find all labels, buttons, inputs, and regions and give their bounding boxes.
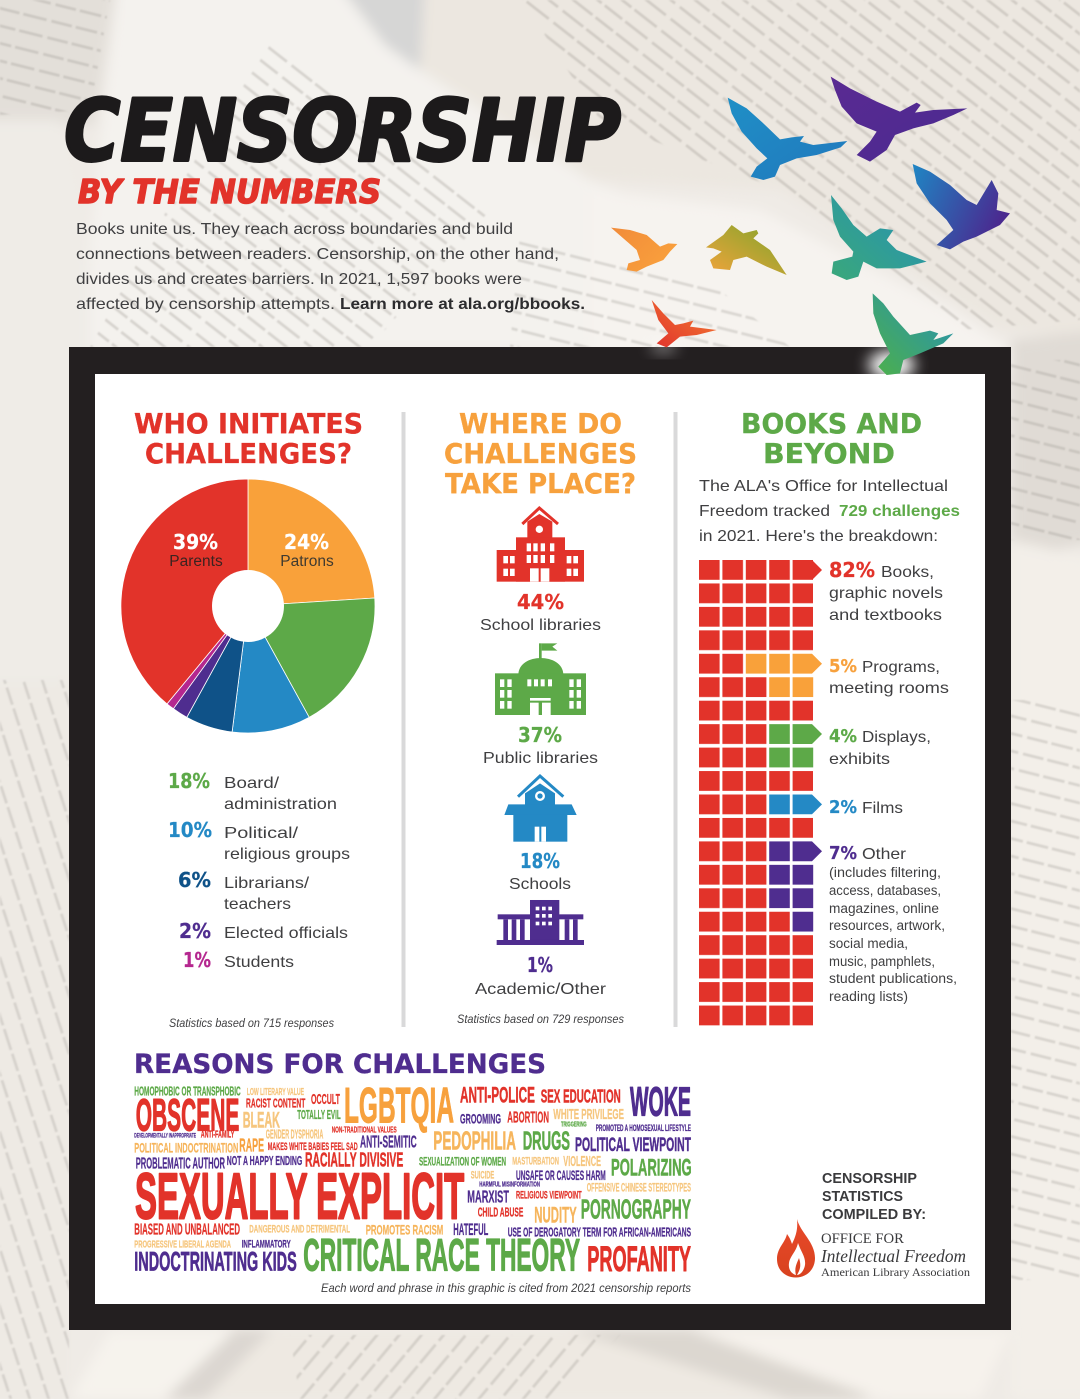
icon: public library [495,643,586,715]
word cloud: reasons for challenges: LOW LITERARY VALUE [247,1087,304,1098]
breakdown legend: exhibits [829,751,890,768]
breakdown legend: Films [862,800,903,817]
word cloud: reasons for challenges: MAKES WHITE BABIES FEEL SAD [268,1141,358,1153]
pie chart: Patrons [280,553,334,570]
word cloud: reasons for challenges: NUDITY [534,1203,577,1228]
bird: green [873,293,953,375]
black frame [69,347,1011,1330]
breakdown legend: Other [862,846,907,863]
credit heading: CENSORSHIP [822,1171,917,1187]
credit heading [822,1171,926,1223]
pie legend: Students [224,954,294,971]
bird: red-orange [652,300,717,347]
waffle chart [699,560,822,1029]
word cloud: reasons for challenges: USE OF DEROGATORY TERM FOR AFRICAN-AMERICANS [508,1225,691,1240]
word cloud: reasons for challenges: HARMFUL MISINFORMATION [479,1182,540,1189]
pie chart [121,479,375,733]
icons: library buildings [495,508,586,945]
word cloud: reasons for challenges: VIOLENCE [563,1154,601,1170]
heading: where do: CHALLENGES [444,437,637,470]
word cloud: reasons for challenges: UNSAFE OR CAUSES HARM [516,1167,606,1183]
breakdown legend: 82% [829,558,875,582]
word cloud: reasons for challenges: ANTI-FAMILY [201,1130,235,1141]
intro paragraph: affected by censorship attempts. [76,296,335,313]
credit heading: STATISTICS [822,1189,903,1205]
word cloud: reasons for challenges: PROMOTES RACISM [366,1221,443,1237]
word cloud: reasons for challenges: NON-TRADITIONAL VALUES [332,1125,397,1135]
breakdown legend: graphic novels [829,585,943,602]
credit heading: COMPILED BY: [822,1207,926,1223]
note: 715 responses: Statistics based on 715 responses [169,1016,334,1030]
heading: who initiates: WHO INITIATES [134,407,363,440]
location labels: Schools [509,876,571,893]
word cloud: reasons for challenges: PROBLEMATIC AUTHOR [136,1155,225,1172]
heading: who initiates [134,407,363,470]
breakdown legend: Books, [881,564,934,581]
breakdown legend: meeting rooms [829,680,949,697]
pie chart: 39% [173,530,218,554]
pie chart: Parents [169,553,223,570]
word cloud: reasons for challenges: CRITICAL RACE THEORY [303,1230,580,1281]
breakdown legend: access, databases, [829,883,941,898]
panel: where do challenges take place [444,407,637,1026]
pie legend: 10% [168,818,212,842]
word cloud: reasons for challenges: PROGRESSIVE LIBERAL AGENDA [134,1239,231,1250]
heading: where do: WHERE DO [459,407,622,440]
pie legend: 1% [183,948,211,972]
breakdown intro: The ALA's Office for Intellectual [699,478,948,495]
word cloud: reasons for challenges: TOTALLY EVIL [297,1108,341,1122]
breakdown legend: Displays, [862,729,931,746]
word cloud: reasons for challenges: OCCULT [311,1091,340,1108]
pie legend [168,769,350,972]
word cloud: reasons for challenges: RAPE [239,1136,264,1156]
word cloud: reasons for challenges: NOT A HAPPY ENDING [227,1154,302,1168]
bird: blue [728,98,847,180]
intro paragraph: divides us and creates barriers. In 2021, 1,597 books were [76,271,522,288]
word cloud: reasons for challenges: LGBTQIA [344,1077,454,1134]
pie legend: religious groups [224,846,350,863]
note: 729 responses: Statistics based on 729 responses [457,1012,624,1026]
intro paragraph: connections between readers. Censorship, on the other hand, [76,246,559,263]
word cloud: reasons for challenges: ANTI-SEMITIC [360,1131,417,1151]
word cloud: reasons for challenges: GENDER DYSPHORIA [266,1127,323,1141]
word cloud: reasons for challenges: HOMOPHOBIC OR TRANSPHOBIC [134,1085,241,1099]
panel: who initiates challenges [121,407,375,1030]
pie legend: 18% [168,769,210,793]
location labels: School libraries [480,617,601,634]
word cloud: reasons for challenges: SEX EDUCATION [541,1086,621,1106]
breakdown legend: student publications, [829,971,957,986]
bird: purple [831,77,967,162]
breakdown legend: (includes filtering, [829,865,941,880]
word cloud: reasons for challenges: POLARIZING [611,1155,692,1182]
heading: books and beyond: BEYOND [763,437,895,470]
panel: books and beyond [699,407,960,1029]
breakdown legend: reading lists) [829,989,908,1004]
bird: teal [831,195,927,280]
word cloud: reasons for challenges: SUICIDE [471,1169,495,1181]
pie legend: 2% [179,919,211,943]
breakdown legend: music, pamphlets, [829,954,935,969]
word cloud: reasons for challenges: MARXIST [467,1187,509,1207]
word cloud: reasons for challenges: HATEFUL [453,1221,488,1239]
pie chart: 24% [284,530,329,554]
icon: academic building [497,900,584,945]
intro paragraph: Learn more at ala.org/bbooks. [340,296,585,313]
location labels: Academic/Other [475,981,607,998]
pie legend: teachers [224,896,291,913]
breakdown legend: 4% [829,726,857,747]
bird: blue-violet [913,164,1010,249]
bird: orange [611,228,677,272]
office for intellectual freedom wordmark: Intellectual Freedom [820,1246,966,1266]
word cloud: reasons for challenges: BLEAK [243,1108,280,1133]
breakdown legend: Programs, [862,659,940,676]
word cloud: reasons for challenges: INFLAMMATORY [242,1238,291,1250]
breakdown legend: social media, [829,936,908,951]
heading: reasons for challenges: REASONS FOR CHALLENGES [134,1049,546,1080]
breakdown legend [829,558,957,1004]
breakdown legend: 7% [829,843,857,864]
office for intellectual freedom wordmark: OFFICE FOR [821,1231,904,1247]
heading: books and beyond [741,407,922,470]
pie legend: Elected officials [224,925,348,942]
breakdown intro: 729 challenges [839,503,960,520]
subtitle: by the numbers: BY THE NUMBERS [78,172,381,211]
location labels: 37% [518,723,562,747]
word cloud: reasons for challenges: MASTURBATION [512,1155,559,1167]
breakdown intro: in 2021. Here's the breakdown: [699,528,938,545]
breakdown legend: 5% [829,656,857,677]
breakdown legend: and textbooks [829,607,942,624]
breakdown legend: 2% [829,797,857,818]
pie legend: Board/ [224,775,280,792]
word cloud: reasons for challenges [134,1077,692,1281]
word cloud: reasons for challenges: CHILD ABUSE [478,1206,523,1220]
location labels: 1% [527,953,553,977]
location labels: Public libraries [483,750,598,767]
word cloud: reasons for challenges: POLITICAL VIEWPOINT [575,1134,691,1156]
intro paragraph: Books unite us. They reach across boundaries and build [76,221,513,238]
pie legend: Political/ [224,825,299,842]
word cloud: reasons for challenges: DANGEROUS AND DETRIMENTAL [249,1223,350,1235]
column divider lines [402,412,678,1027]
location labels [475,590,607,998]
breakdown legend: magazines, online [829,901,939,916]
icon: flock of birds [611,77,1010,380]
word cloud: reasons for challenges: DRUGS [523,1125,570,1155]
word cloud: reasons for challenges: OBSCENE [136,1090,239,1141]
text: WOKE [630,1079,691,1125]
credit block [777,1171,970,1279]
word cloud: reasons for challenges: PROMOTED A HOMOSEXUAL LIFESTYLE [596,1123,691,1133]
title: CENSORSHIP: CENSORSHIP [64,82,621,182]
breakdown legend: resources, artwork, [829,918,945,933]
word cloud: reasons for challenges: RACIST CONTENT [246,1096,305,1110]
white content panel [95,374,985,1304]
word cloud: reasons for challenges: PROFANITY [587,1240,691,1279]
pie legend: administration [224,796,337,813]
icon: school [504,776,577,842]
heading: where do: TAKE PLACE? [445,467,636,500]
word cloud: reasons for challenges: RELIGIOUS VIEWPOINT [516,1189,582,1201]
word cloud: reasons for challenges: TRIGGERING [561,1122,587,1129]
location labels: 18% [520,849,560,873]
word cloud: reasons for challenges: ABORTION [507,1109,549,1126]
word cloud: reasons for challenges: WHITE PRIVILEGE [553,1106,624,1123]
pie legend: 6% [178,868,211,892]
caption: word cloud source: Each word and phrase in this graphic is cited from 2021 censorship reports [321,1281,691,1295]
heading: where do [444,407,637,500]
breakdown intro [699,478,960,545]
bird: olive [706,225,787,275]
text: OFFENSIVE CHINESE STEREOTYPES [587,1181,691,1195]
word cloud: reasons for challenges: PEDOPHILIA [433,1125,516,1155]
word cloud: reasons for challenges: BIASED AND UNBALANCED [134,1221,240,1238]
office for intellectual freedom wordmark: American Library Association [821,1265,970,1279]
word cloud: reasons for challenges: POLITICAL INDOCTRINATION [134,1139,238,1155]
breakdown intro: Freedom tracked [699,503,830,520]
pie legend: Librarians/ [224,875,310,892]
heading: who initiates: CHALLENGES? [145,437,352,470]
word cloud: reasons for challenges: DEVELOPMENTALLY INAPPROPRIATE [134,1133,196,1140]
word cloud: reasons for challenges: RACIALLY DIVISIVE [305,1150,403,1172]
word cloud: reasons for challenges: ANTI-POLICE [460,1082,535,1107]
word cloud: reasons for challenges: INDOCTRINATING KIDS [134,1247,297,1277]
text: PORNOGRAPHY [581,1193,691,1224]
word cloud: reasons for challenges: SEXUALLY EXPLICIT [135,1159,464,1232]
location labels: 44% [517,590,564,614]
word cloud: reasons for challenges: SEXUALIZATION OF WOMEN [419,1155,506,1169]
icon: flame logo [777,1219,815,1278]
heading: books and beyond: BOOKS AND [741,407,922,440]
intro paragraph [76,221,585,313]
office for intellectual freedom wordmark [820,1231,970,1279]
word cloud: reasons for challenges: GROOMING [460,1110,501,1126]
icon: school library [497,508,584,582]
